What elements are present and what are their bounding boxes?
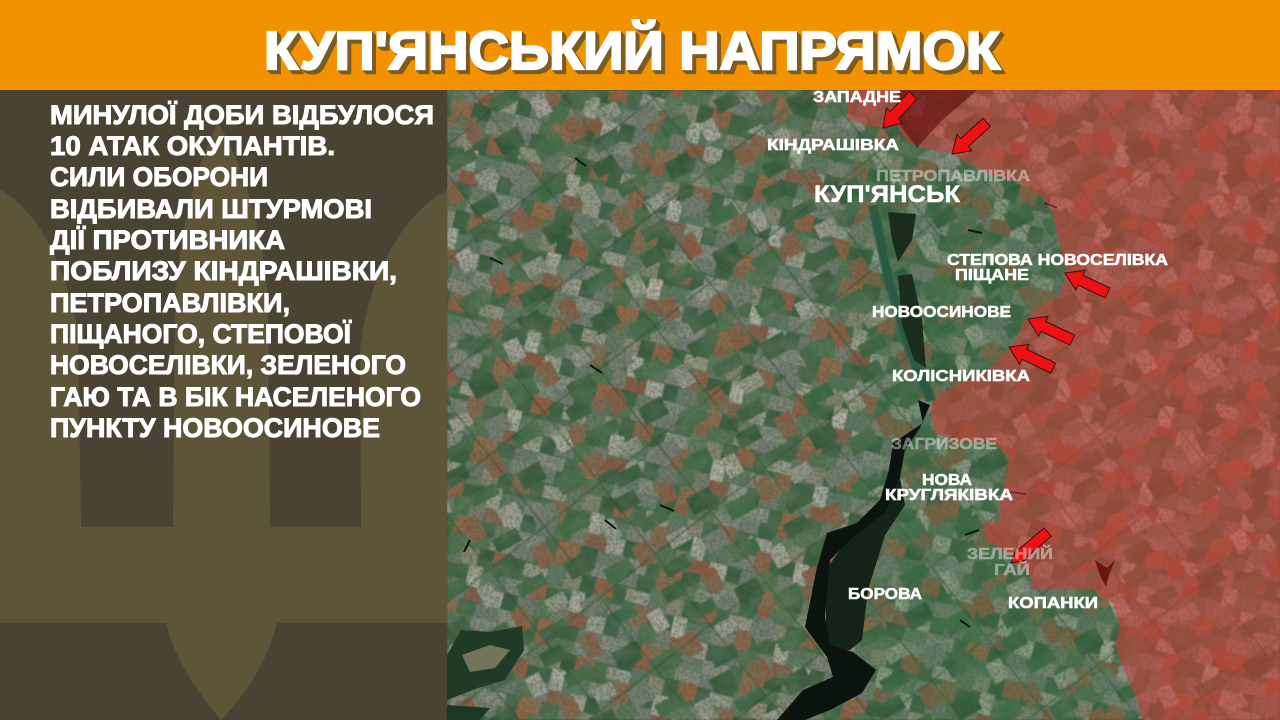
map: satellite base with occupied territory	[447, 90, 1280, 720]
text block: daily summary: ГАЮ ТА В БІК НАСЕЛЕНОГО	[50, 382, 421, 412]
arrow: towards Stepova Novoselivka	[1060, 263, 1112, 303]
text block: daily summary: НОВОСЕЛІВКИ, ЗЕЛЕНОГО	[50, 350, 406, 380]
panel: header band	[0, 0, 1280, 90]
arrow: towards Zelenyi Hai	[1006, 526, 1053, 569]
map labels: settlements: КОЛІСНИКІВКА	[892, 368, 1030, 385]
map labels: settlements: ЗЕЛЕНИЙ	[967, 545, 1053, 563]
map: forests beside river	[888, 212, 926, 368]
text block: daily summary: 10 АТАК ОКУПАНТІВ.	[50, 131, 335, 161]
arrow: towards Novoosynove north	[1023, 309, 1077, 350]
map labels: settlements	[767, 89, 1168, 612]
arrow: towards Novoosynove south	[1004, 337, 1058, 378]
map labels: settlements: ПІЩАНЕ	[955, 267, 1029, 284]
text block: daily summary	[50, 100, 434, 443]
text block: daily summary: ПІЩАНОГО, СТЕПОВОЇ	[50, 319, 352, 349]
map labels: settlements: КІНДРАШІВКА	[767, 137, 899, 154]
text block: daily summary: ДІЇ ПРОТИВНИКА	[50, 225, 285, 255]
text block: daily summary: ВІДБИВАЛИ ШТУРМОВІ	[50, 194, 372, 224]
map labels: settlements: НОВА	[922, 472, 972, 489]
map labels: settlements: ПЕТРОПАВЛІВКА	[876, 168, 1030, 185]
map: dark forest beside reservoir	[826, 478, 905, 650]
map labels: settlements: КУП'ЯНСЬК	[814, 181, 960, 208]
map labels: settlements: ЗАПАДНЕ	[813, 89, 901, 106]
icon: trident emblem watermark	[0, 122, 447, 720]
map: reservoir	[777, 400, 930, 720]
arrow: towards Petropavlivka	[945, 114, 994, 162]
map: forest lower left edge	[447, 705, 490, 720]
map labels: settlements: ЗАГРИЗОВЕ	[891, 436, 997, 453]
map labels: settlements: КРУГЛЯКІВКА	[885, 487, 1013, 504]
map labels: settlements: НОВООСИНОВЕ	[872, 304, 1011, 321]
map: forest lower left	[447, 626, 524, 700]
map: dark reservoir in occupied area	[1095, 560, 1115, 587]
text block: daily summary: ПЕТРОПАВЛІВКИ,	[50, 288, 290, 318]
text block: daily summary: СИЛИ ОБОРОНИ	[50, 162, 268, 192]
map: clearing in lower left forest	[462, 645, 510, 672]
map: greener central corridor	[830, 130, 1130, 720]
text block: daily summary: ПУНКТУ НОВООСИНОВЕ	[50, 413, 380, 443]
title: КУП'ЯНСЬКИЙ НАПРЯМОК	[264, 20, 1001, 81]
arrow: towards Kindrashivka	[875, 88, 921, 135]
map labels: settlements: СТЕПОВА НОВОСЕЛІВКА	[947, 252, 1168, 269]
map labels: settlements: БОРОВА	[848, 586, 922, 603]
map: darker occupied zone	[898, 90, 977, 148]
map: gullies	[464, 158, 1057, 627]
map labels: settlements: КОПАНКИ	[1008, 595, 1098, 612]
text block: daily summary: МИНУЛОЇ ДОБИ ВІДБУЛОСЯ	[50, 100, 434, 130]
text block: daily summary: ПОБЛИЗУ КІНДРАШІВКИ,	[50, 256, 397, 286]
panel: left text panel	[0, 90, 447, 720]
map labels: settlements: ГАЙ	[994, 561, 1030, 579]
map: occupied territory overlay	[847, 90, 1280, 720]
map: river corridor north	[868, 205, 936, 402]
